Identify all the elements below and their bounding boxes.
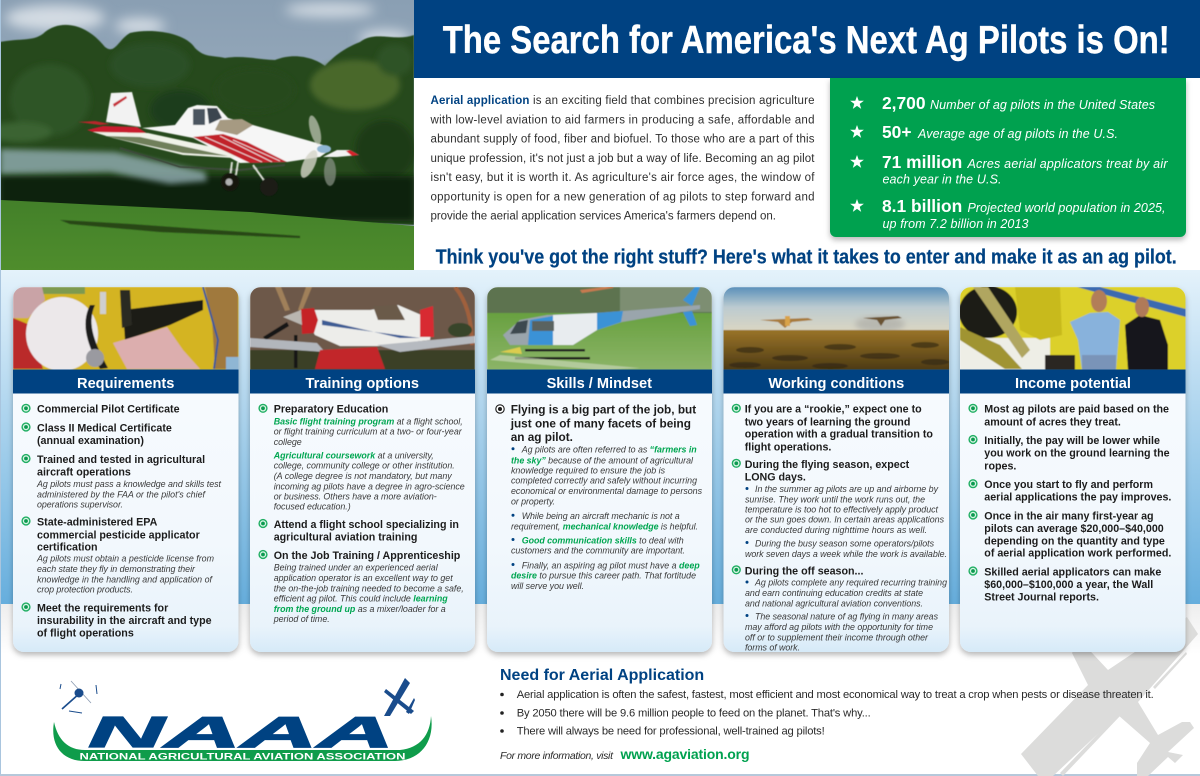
list: an ag pilot. bbox=[511, 430, 573, 444]
header bar bbox=[724, 370, 949, 394]
list: of flight operations bbox=[37, 628, 134, 640]
list bbox=[496, 403, 703, 591]
list: application operator is an excellent way to get bbox=[274, 573, 453, 583]
list: or property. bbox=[511, 496, 555, 506]
list: will serve you well. bbox=[511, 581, 584, 591]
list: Flying is a big part of the job, but bbox=[511, 403, 696, 417]
bullets bbox=[500, 689, 1154, 738]
list: completed correctly and safely without incurring bbox=[511, 476, 697, 486]
list: Trained and tested in agricultural bbox=[37, 454, 205, 466]
list: Once in the air many first-year ag bbox=[984, 510, 1154, 522]
list: off or to supplement their income through other bbox=[745, 632, 929, 642]
list: Once you start to fly and perform bbox=[984, 479, 1153, 491]
header bar bbox=[960, 370, 1186, 394]
list: commercial pesticide applicator bbox=[37, 530, 200, 542]
list: If you are a “rookie,” expect one to bbox=[745, 404, 922, 416]
list: During the busy season some operators/pilots bbox=[755, 539, 935, 549]
list: $60,000–$100,000 a year, the Wall bbox=[984, 579, 1153, 591]
list: of aerial application work performed. bbox=[984, 548, 1171, 560]
hero photo: crop duster spraying field bbox=[0, 0, 415, 270]
stat: 71 million: 71 million bbox=[882, 152, 962, 172]
list: Skilled aerial applicators can make bbox=[984, 566, 1161, 578]
list: aerial applications the pay improves. bbox=[984, 492, 1171, 504]
panel: working conditions bbox=[723, 287, 950, 653]
list: (annual examination) bbox=[37, 435, 144, 447]
list: Commercial Pilot Certificate bbox=[37, 404, 180, 416]
list: efficient ag pilot. This could include learning bbox=[274, 594, 448, 604]
photo: ag plane under rainbow bbox=[250, 287, 475, 370]
list: Class II Medical Certificate bbox=[37, 422, 172, 434]
list: operation with a gradual transition to bbox=[745, 429, 933, 441]
stat: 2,700: 2,700 bbox=[882, 93, 926, 113]
stat: 50+: Average age of ag pilots in the U.S. bbox=[917, 127, 1118, 141]
panel: skills / mindset bbox=[487, 286, 712, 652]
list: from the ground up as a mixer/loader for a bbox=[274, 604, 446, 614]
bullets: Aerial application is often the safest, fastest, most efficient and most economical way to treat a crop when pests or disease threaten it. bbox=[517, 689, 1154, 701]
list: the sky” because of the amount of agricultural bbox=[511, 455, 694, 465]
list: focused education.) bbox=[274, 502, 351, 512]
more info link: www.agaviation.org bbox=[620, 746, 750, 762]
more info link bbox=[500, 746, 750, 762]
header bar bbox=[250, 370, 475, 394]
list bbox=[22, 404, 222, 640]
list: customers and the community are important. bbox=[511, 546, 685, 556]
intro paragraph: abundant supply of food, fiber and biofuel. To those who are a part of this bbox=[430, 134, 815, 146]
list bbox=[969, 404, 1171, 604]
list: incoming ag pilots have a degree in agro-science bbox=[274, 481, 465, 491]
list: crop protection products. bbox=[37, 585, 133, 595]
photo: pilot helmet in cockpit bbox=[13, 287, 239, 371]
list: period of time. bbox=[273, 614, 330, 624]
list: certification bbox=[37, 542, 98, 554]
list: Street Journal reports. bbox=[984, 592, 1099, 604]
list: agricultural aviation training bbox=[274, 531, 417, 543]
heading: Working conditions bbox=[768, 376, 904, 392]
more info link: For more information, visit bbox=[500, 750, 614, 762]
title banner bbox=[414, 0, 1200, 78]
stat: 2,700: Number of ag pilots in the United States bbox=[930, 98, 1155, 112]
intro paragraph: with low-level aviation to aid farmers in producing a safe, affordable and bbox=[430, 114, 814, 126]
list: Good communication skills to deal with bbox=[522, 535, 684, 545]
intro paragraph: unique profession, it's not just a job but a way of life. Becoming an ag pilot bbox=[430, 153, 815, 165]
list bbox=[732, 404, 947, 653]
list: Agricultural coursework at a university, bbox=[273, 450, 434, 460]
list: or flight training curriculum at a two- or four-year bbox=[274, 427, 463, 437]
list: Ag pilots complete any required recurring training bbox=[754, 578, 947, 588]
heading: Need for Aerial Application bbox=[500, 667, 704, 684]
watermark: grey airplane silhouette bbox=[1021, 617, 1198, 776]
list: Ag pilots are often referred to as “farmers in bbox=[521, 444, 697, 454]
list: Finally, an aspiring ag pilot must have a deep bbox=[522, 560, 700, 570]
stat: 71 million: Acres aerial applicators treat by air bbox=[966, 157, 1168, 171]
list: State-administered EPA bbox=[37, 517, 158, 529]
photo: helicopter spraying bbox=[487, 286, 712, 370]
list: Ag pilots must obtain a pesticide license from bbox=[36, 554, 214, 564]
intro paragraph: isn't easy, but it is worth it. As agriculture's air force ages, the window of bbox=[430, 172, 815, 184]
photo: two ag planes over field bbox=[723, 287, 950, 370]
icon: airplane bbox=[384, 678, 415, 716]
list: flight operations. bbox=[745, 441, 831, 453]
stat: 71 million: each year in the U.S. bbox=[882, 172, 1002, 186]
list bbox=[259, 404, 465, 624]
header bar bbox=[13, 370, 238, 394]
list: During the off season... bbox=[745, 565, 863, 577]
heading: Income potential bbox=[1015, 376, 1131, 392]
header bar bbox=[487, 370, 712, 394]
list: the on-the-job training needed to become a safe, bbox=[274, 583, 464, 593]
list: two years of learning the ground bbox=[745, 416, 910, 428]
list: The seasonal nature of ag flying in many areas bbox=[755, 612, 939, 622]
panel: statistics bbox=[830, 78, 1186, 237]
list: sunrise. They work until the work runs out, the bbox=[745, 494, 925, 504]
panel: requirements bbox=[13, 287, 239, 652]
list: Attend a flight school specializing in bbox=[274, 519, 459, 531]
list: insurability in the aircraft and type bbox=[37, 615, 212, 627]
bullet bbox=[496, 405, 504, 413]
list: (A college degree is not mandatory, but many bbox=[274, 471, 452, 481]
stat: 8.1 billion: 8.1 billion bbox=[882, 196, 962, 216]
list: each state they fly in demonstrating their bbox=[37, 564, 196, 574]
list: requirement, mechanical knowledge is helpful. bbox=[511, 521, 698, 531]
icon: helicopter bbox=[60, 681, 97, 713]
intro paragraph: opportunity is open for a new generation of ag pilots to step forward and bbox=[430, 191, 814, 203]
list: may afford ag pilots with the opportunity for time bbox=[745, 622, 933, 632]
list: temperature is too hot to effectively apply product bbox=[745, 505, 939, 515]
list: While being an aircraft mechanic is not a bbox=[522, 511, 680, 521]
list: amount of acres they treat. bbox=[984, 416, 1121, 428]
logo: NAAA bbox=[53, 678, 432, 761]
list: you work on the ground learning the bbox=[984, 448, 1170, 460]
list: college bbox=[274, 437, 302, 447]
list: just one of many facets of being bbox=[510, 416, 691, 430]
stat: 8.1 billion: up from 7.2 billion in 2013 bbox=[882, 217, 1029, 231]
list: Meet the requirements for bbox=[37, 602, 168, 614]
list: work seven days a week while the work is available. bbox=[745, 549, 947, 559]
intro paragraph: provide the aerial application services America's farmers depend on. bbox=[430, 211, 776, 223]
airplane bbox=[78, 92, 359, 196]
list: aircraft operations bbox=[37, 466, 131, 478]
photo: two pilots beside yellow plane bbox=[959, 286, 1186, 370]
bullets: By 2050 there will be 9.6 million people to feed on the planet. That's why... bbox=[517, 708, 871, 720]
list: economical or environmental damage to persons bbox=[511, 486, 703, 496]
stat: 8.1 billion bbox=[850, 196, 1166, 231]
list: LONG days. bbox=[745, 472, 806, 484]
list: operations supervisor. bbox=[37, 500, 123, 510]
list: administered by the FAA or the pilot's chief bbox=[37, 489, 207, 499]
list: During the flying season, expect bbox=[745, 459, 910, 471]
stat: 71 million bbox=[850, 152, 1168, 186]
list: are conducted during nighttime hours as well. bbox=[745, 525, 927, 535]
stat: 8.1 billion: Projected world population in 2025, bbox=[968, 201, 1166, 215]
list: Basic flight training program at a flight school, bbox=[274, 416, 463, 426]
list: desire to pursue this career path. That fortitude bbox=[511, 571, 696, 581]
stat: 50+: 50+ bbox=[882, 122, 912, 142]
list: and earn continuing education credits at state bbox=[745, 588, 923, 598]
list: Being trained under an experienced aerial bbox=[274, 563, 439, 573]
panel: need for aerial application bbox=[500, 667, 1154, 762]
list: ropes. bbox=[984, 460, 1016, 472]
list: In the summer ag pilots are up and airborne by bbox=[755, 484, 939, 494]
list: college, community college or other institution. bbox=[274, 461, 455, 471]
list: On the Job Training / Apprenticeship bbox=[274, 550, 461, 562]
heading: Training options bbox=[306, 376, 419, 392]
list: and national agricultural aviation conventions. bbox=[745, 598, 923, 608]
list: forms of work. bbox=[745, 643, 800, 653]
list: Ag pilots must pass a knowledge and skills test bbox=[36, 479, 222, 489]
NAAA wordmark: NAAA bbox=[88, 708, 394, 757]
stat: 50+ bbox=[850, 122, 1118, 142]
association name: NATIONAL AGRICULTURAL AVIATION ASSOCIATION bbox=[80, 751, 406, 761]
list: Initially, the pay will be lower while bbox=[984, 435, 1160, 447]
list: knowledge required to ensure the job is bbox=[511, 465, 666, 475]
list: or the sun goes down. In certain areas applications bbox=[745, 515, 945, 525]
green swoosh bbox=[53, 716, 432, 761]
panel: income potential bbox=[959, 286, 1186, 652]
panel: training options bbox=[250, 287, 475, 652]
list: pilots can average $20,000–$40,000 bbox=[984, 523, 1164, 535]
intro paragraph: Aerial application is an exciting field that combines precision agriculture bbox=[430, 95, 814, 107]
heading: Requirements bbox=[77, 376, 174, 392]
heading: Skills / Mindset bbox=[547, 376, 652, 392]
list: Most ag pilots are paid based on the bbox=[984, 404, 1169, 416]
list: or business. Others have a more aviation- bbox=[274, 491, 437, 501]
intro paragraph bbox=[430, 95, 815, 223]
list: depending on the quantity and type bbox=[984, 535, 1165, 547]
list: Preparatory Education bbox=[274, 404, 388, 416]
stat: 2,700 bbox=[850, 93, 1155, 113]
list: knowledge in the handling and application of bbox=[37, 574, 214, 584]
bullets: There will always be need for professional, well-trained ag pilots! bbox=[517, 726, 825, 738]
